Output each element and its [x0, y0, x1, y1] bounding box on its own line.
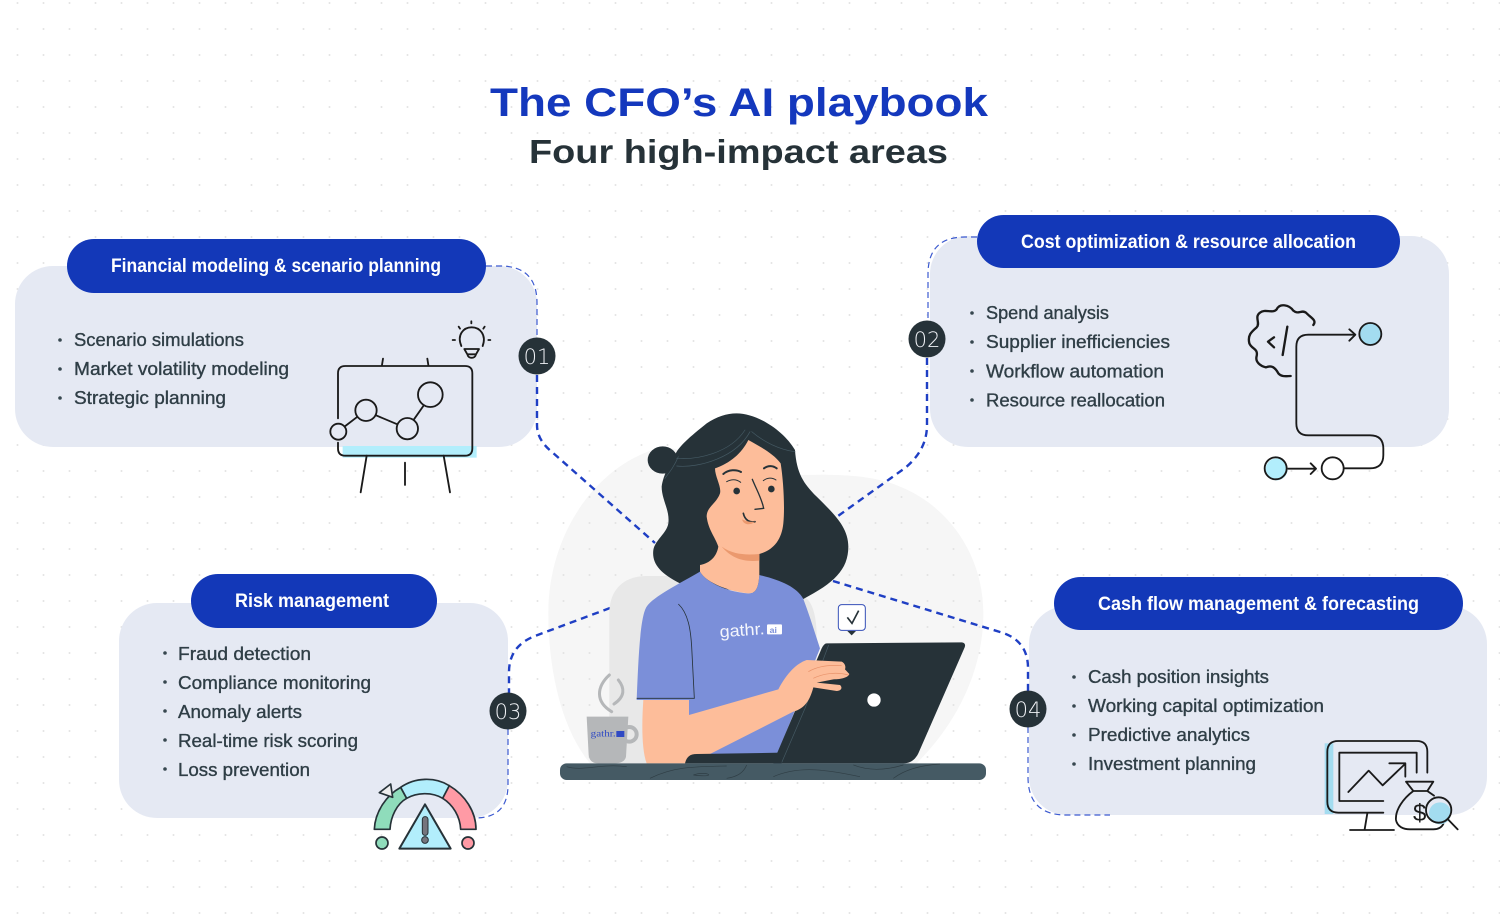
number badge 04 — [1010, 690, 1046, 728]
illustration: woman with laptop — [560, 413, 986, 780]
list: cash flow: Predictive analytics — [1088, 725, 1250, 745]
panel: cash flow — [1029, 577, 1487, 815]
connector lines — [465, 237, 1110, 818]
dollar sign: $ — [1413, 800, 1426, 827]
pill heading: financial modeling: Financial modeling & scenario planning — [111, 256, 441, 277]
list: cost optimization: Resource reallocation — [986, 390, 1165, 410]
facial features — [665, 430, 795, 522]
list: cash flow: Investment planning — [1088, 754, 1256, 774]
pill heading: cost optimization: Cost optimization & resource allocation — [1021, 232, 1356, 253]
panel: financial modeling — [15, 239, 537, 447]
list: cost optimization: Workflow automation — [986, 362, 1164, 382]
pill heading: cost optimization — [977, 215, 1400, 268]
pill heading: risk management — [191, 574, 437, 628]
coffee mug — [587, 675, 637, 763]
list: risk management: Compliance monitoring — [178, 673, 371, 693]
pill heading: cash flow — [1054, 577, 1463, 630]
background blob — [548, 447, 983, 763]
list: risk management: Fraud detection — [178, 644, 311, 664]
list: cost optimization: Supplier inefficiencies — [986, 332, 1170, 352]
number badge 04: 04 — [1015, 698, 1041, 722]
icon: presentation board — [330, 321, 490, 492]
number badge 02: 02 — [914, 328, 940, 352]
coffee mug: gathr. — [591, 730, 616, 740]
title: The CFO’s AI playbook — [490, 81, 989, 125]
list: financial modeling: Scenario simulations — [74, 330, 244, 350]
shirt logo — [719, 619, 782, 641]
list: financial modeling: Market volatility modeling — [74, 359, 289, 379]
icon: light bulb — [453, 321, 490, 358]
laptop base — [685, 753, 782, 763]
list: risk management: Real-time risk scoring — [178, 731, 358, 751]
list: financial modeling: Strategic planning — [74, 388, 226, 408]
t-shirt — [637, 572, 820, 754]
list: risk management: Loss prevention — [178, 760, 310, 780]
pill heading: financial modeling — [67, 239, 486, 293]
list: risk management — [163, 644, 371, 780]
number badge 03: 03 — [495, 700, 521, 724]
number badge 02 — [908, 320, 946, 358]
list: financial modeling — [58, 330, 289, 408]
list: cash flow — [1072, 667, 1324, 774]
list: cash flow: Cash position insights — [1088, 667, 1269, 687]
arm and hand — [642, 660, 849, 763]
number badge 03 — [490, 692, 526, 730]
pill heading: risk management: Risk management — [235, 591, 390, 612]
face and neck — [700, 440, 784, 593]
chair — [609, 576, 817, 763]
number badge 01: 01 — [524, 345, 550, 369]
hair — [648, 413, 848, 599]
subtitle: Four high-impact areas — [529, 133, 948, 170]
number badge 01 — [518, 338, 556, 374]
check bubble — [838, 605, 865, 635]
shirt logo: ai — [770, 625, 777, 635]
list: risk management: Anomaly alerts — [178, 702, 302, 722]
panel: risk management — [119, 574, 508, 818]
panel: cost optimization — [930, 215, 1449, 447]
icon: risk gauge — [374, 779, 476, 849]
laptop — [773, 642, 965, 763]
list: cash flow: Working capital optimization — [1088, 696, 1324, 716]
desk — [560, 763, 986, 780]
icon: monitor and money bag — [1325, 741, 1458, 830]
icon: code workflow — [1249, 305, 1383, 480]
shirt logo: gathr. — [719, 619, 765, 641]
pill heading: cash flow: Cash flow management & forecasting — [1098, 594, 1419, 615]
list: cost optimization — [970, 303, 1170, 410]
list: cost optimization: Spend analysis — [986, 303, 1109, 323]
